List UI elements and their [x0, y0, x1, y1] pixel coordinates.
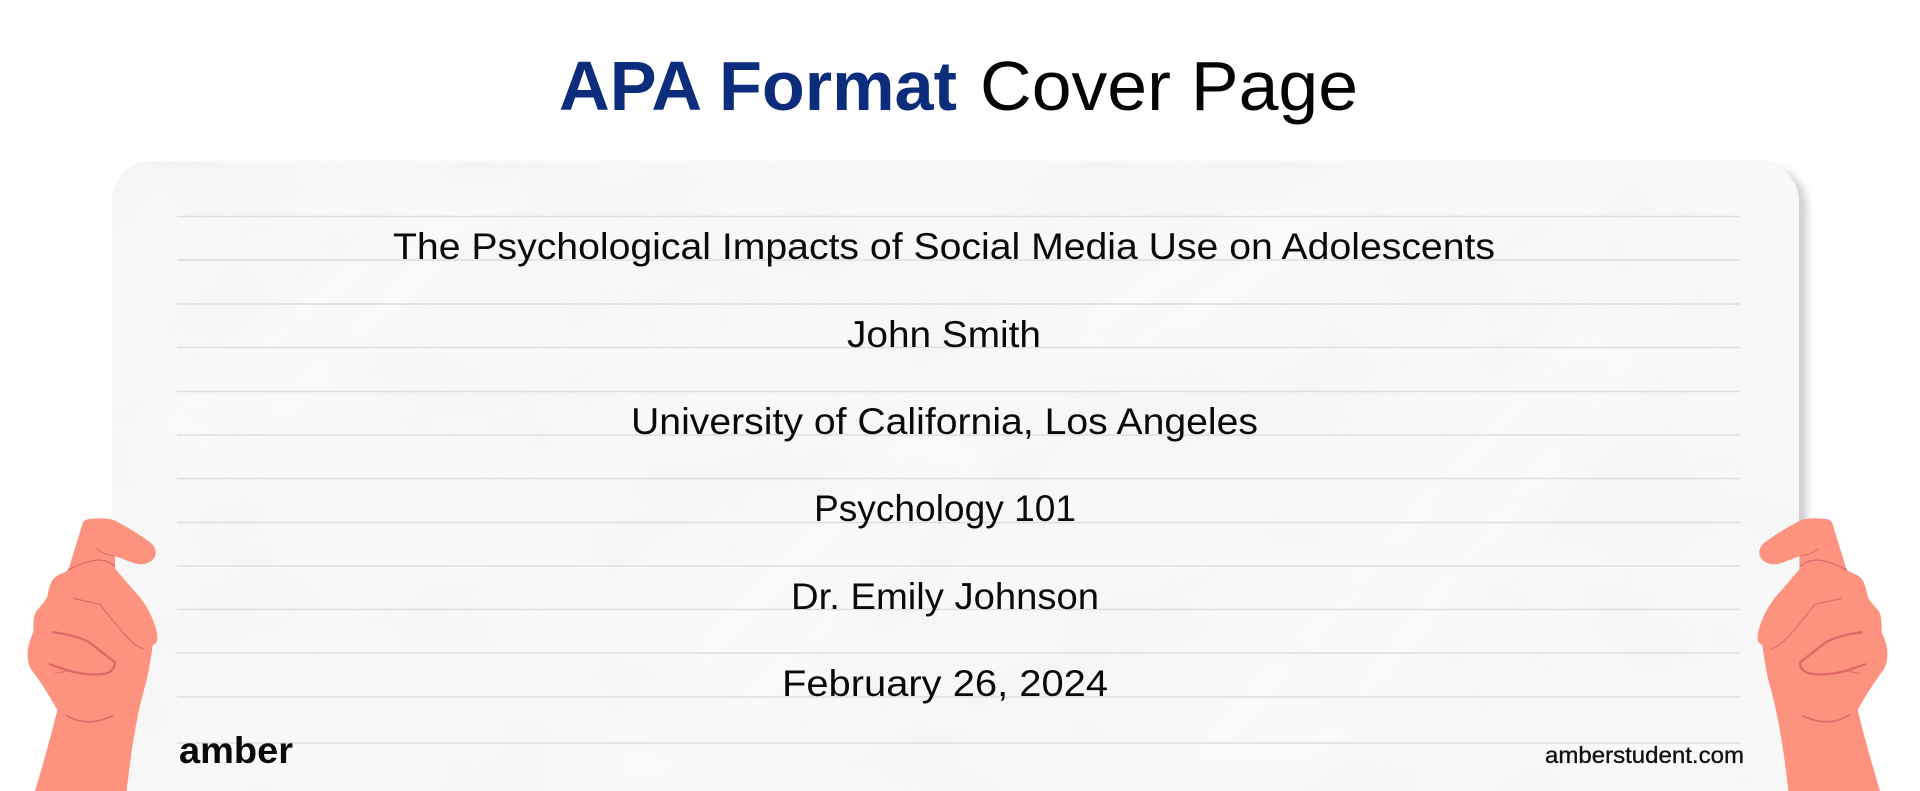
- title: APA Format: [559, 47, 957, 125]
- course: Psychology 101: [814, 488, 1076, 529]
- panel: paper sheet: [112, 161, 1807, 791]
- author name: John Smith: [847, 314, 1041, 355]
- logo: amber: amber: [179, 730, 293, 771]
- icon: right hand: [1758, 518, 1887, 791]
- icon: left hand: [28, 518, 157, 791]
- title: Cover Page: [980, 47, 1358, 125]
- paper title text: The Psychological Impacts of Social Media Use on Adolescents: [393, 226, 1495, 267]
- institution: University of California, Los Angeles: [631, 401, 1258, 442]
- ruled lines: [177, 216, 1740, 743]
- website url: amberstudent.com: [1545, 742, 1744, 768]
- title: [559, 47, 1358, 125]
- date: February 26, 2024: [782, 663, 1108, 704]
- instructor: Dr. Emily Johnson: [791, 576, 1099, 617]
